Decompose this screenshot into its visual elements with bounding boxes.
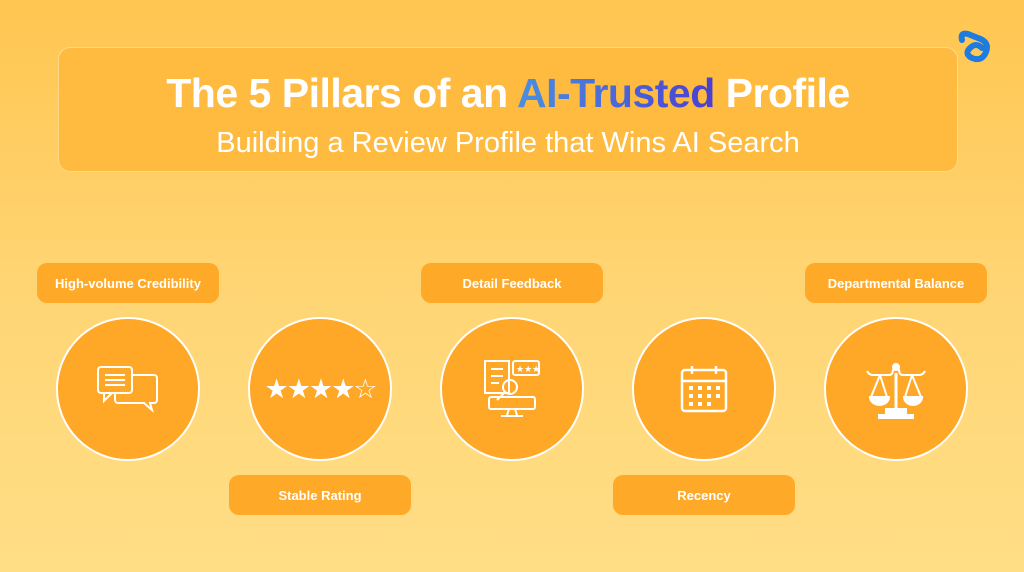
label: Detail Feedback: Detail Feedback: [462, 276, 562, 290]
circle: chat icon: [56, 317, 200, 461]
heading: The 5 Pillars of an AI-Trusted Profile: [166, 70, 850, 116]
logo icon: [958, 30, 990, 62]
label: Detail Feedback: [421, 263, 603, 303]
circle: feedback icon: ★★★: [516, 364, 540, 374]
circle: stars icon: [248, 317, 392, 461]
label: Recency: Recency: [677, 488, 731, 502]
label: High-volume Credibility: [37, 263, 219, 303]
circle: stars icon: ★★★★☆: [264, 374, 376, 404]
label: Recency: [613, 475, 795, 515]
label: Departmental Balance: Departmental Balance: [828, 276, 964, 290]
circle: feedback icon: [440, 317, 584, 461]
circle: calendar icon: [632, 317, 776, 461]
circle: scale icon: [824, 317, 968, 461]
label: High-volume Credibility: High-volume Credibility: [55, 276, 201, 290]
label: Departmental Balance: [805, 263, 987, 303]
label: Stable Rating: [229, 475, 411, 515]
subtitle: Building a Review Profile that Wins AI Search: [216, 127, 800, 159]
title panel: [58, 47, 958, 172]
label: Stable Rating: Stable Rating: [278, 488, 362, 502]
